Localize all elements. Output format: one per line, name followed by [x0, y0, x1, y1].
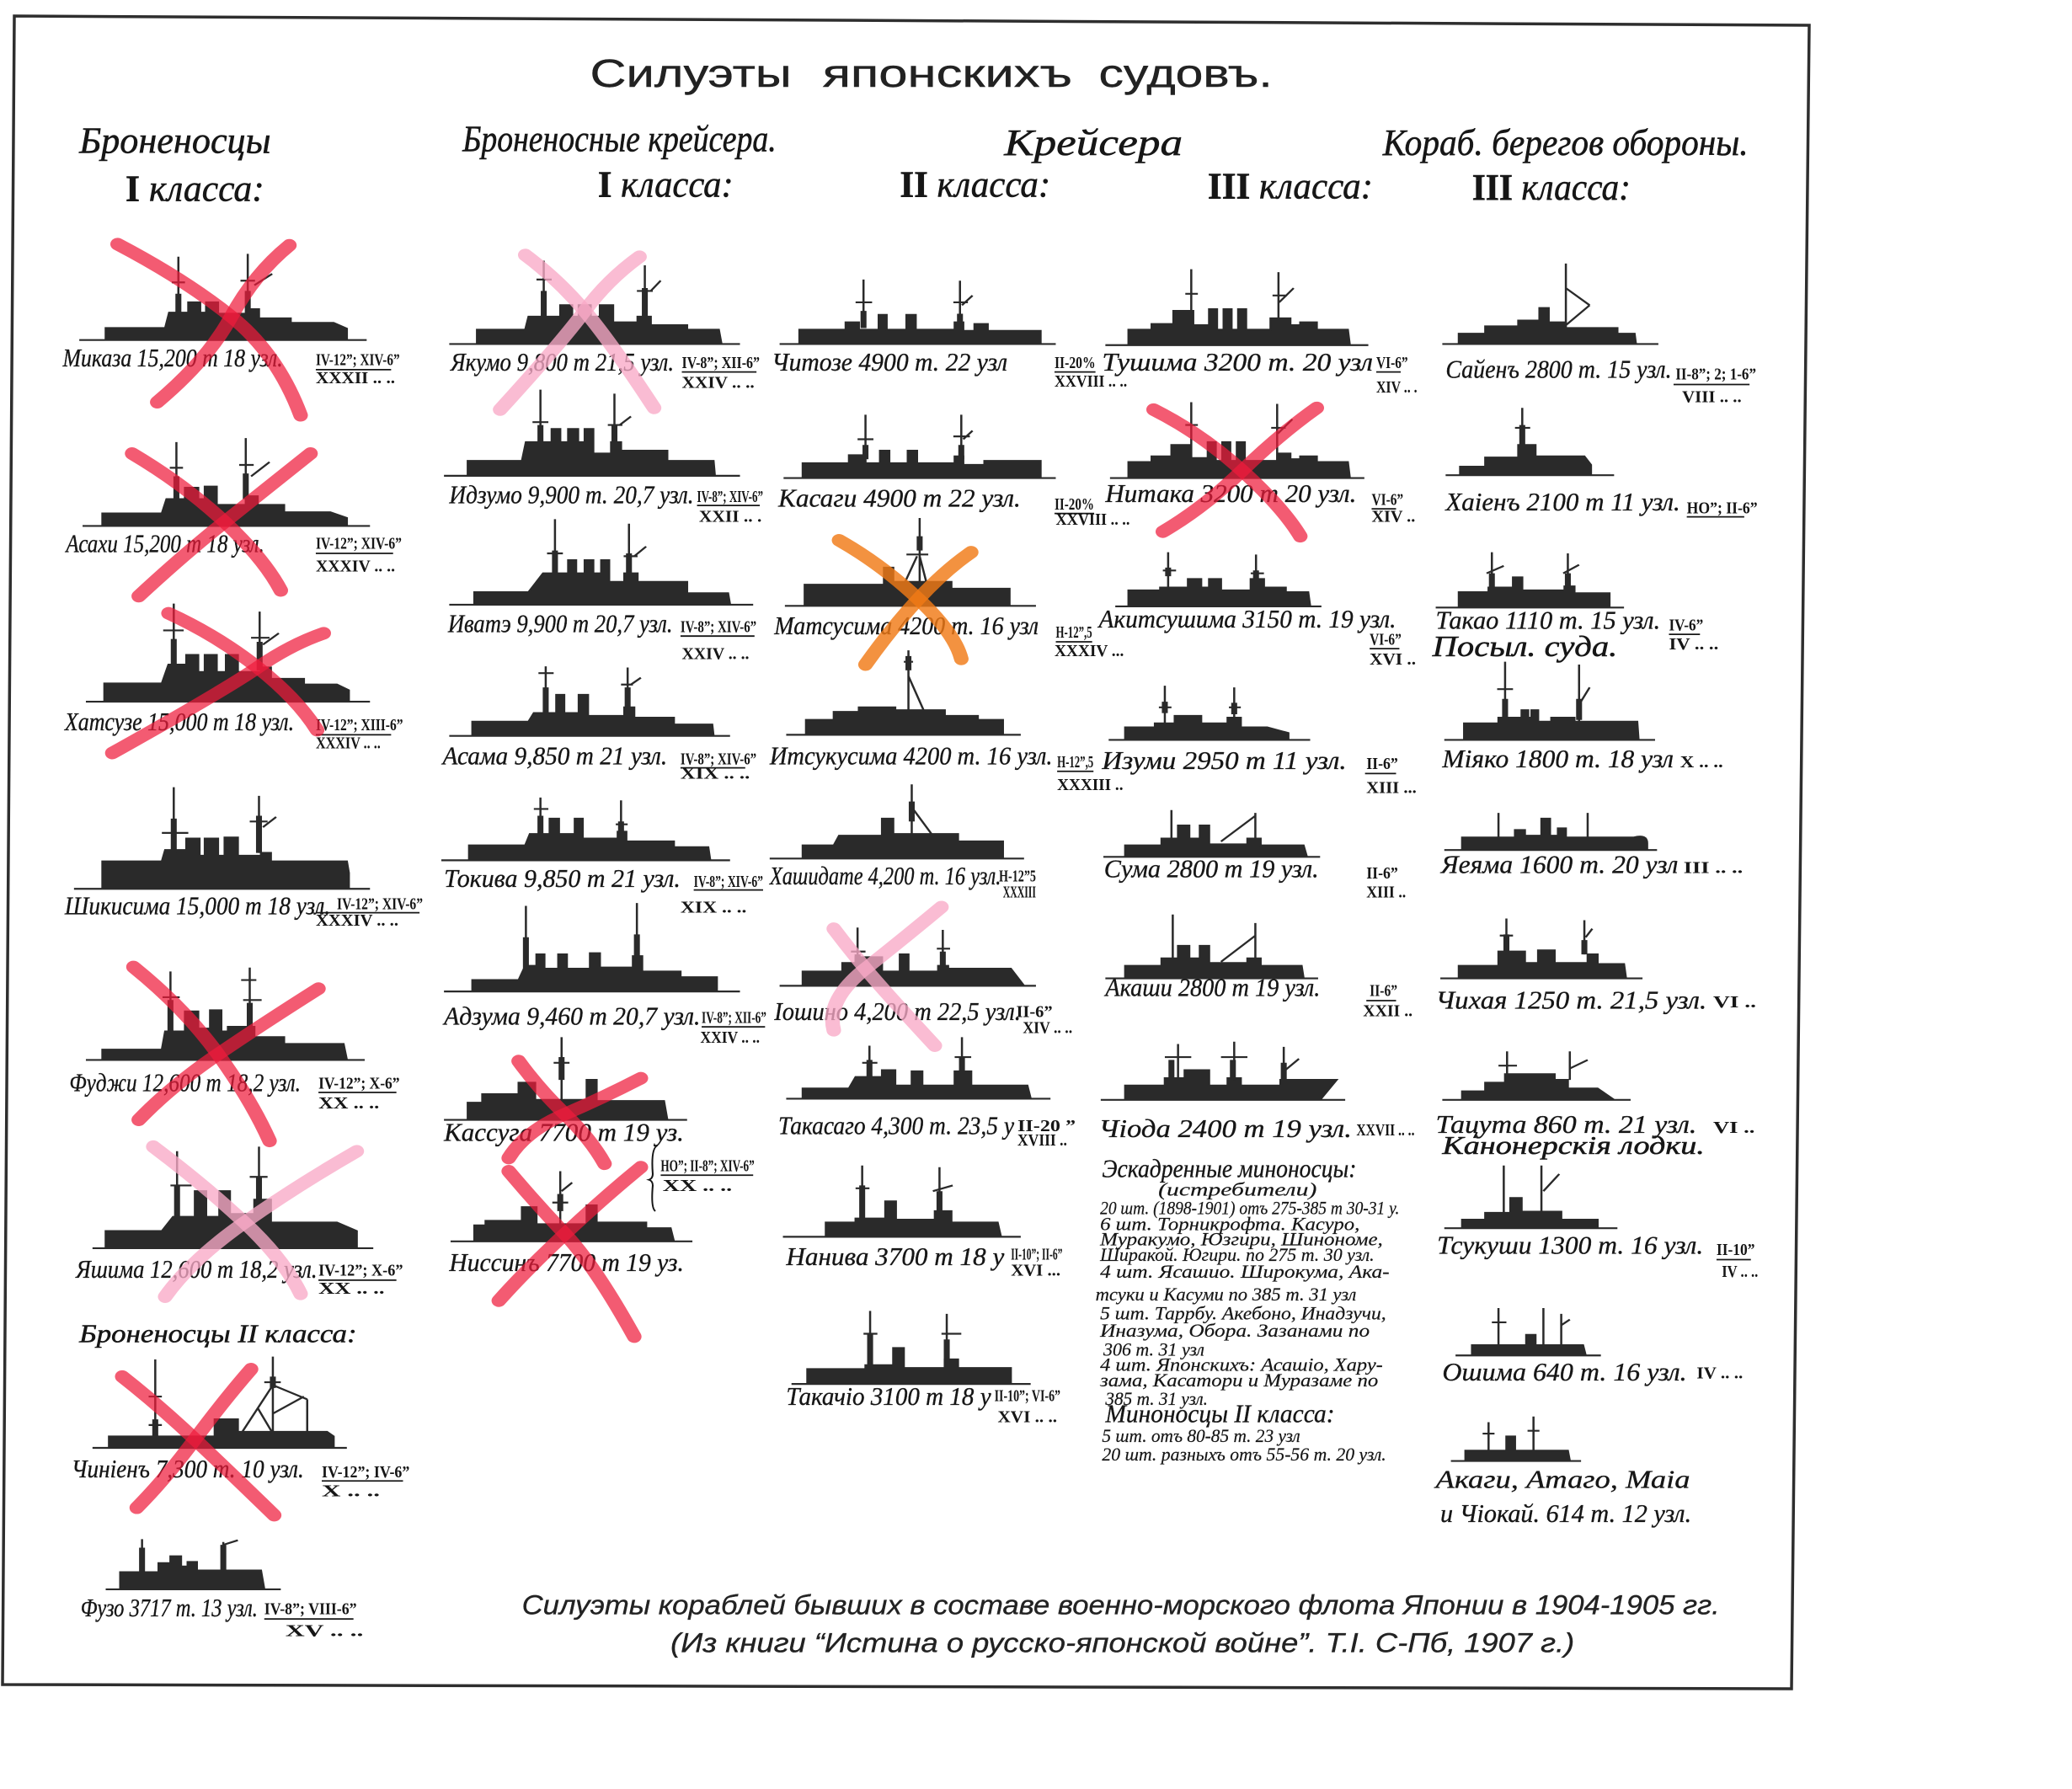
ship: Tsushima: VI-6” [1376, 352, 1408, 371]
armament note: Kasuga and Nisshin: XX .. .. [663, 1176, 732, 1195]
ship: Chitose [772, 280, 1055, 377]
ship: Yaeyama: III .. .. [1684, 857, 1743, 877]
ship: Asahi: IV-12”; XIV-6” [316, 533, 402, 553]
ship: Saien: VIII .. .. [1682, 387, 1742, 406]
ship: Oshima: Ошима 640 т. 16 узл. [1442, 1358, 1687, 1386]
text block: destroyers: 5 шт. отъ 80-85 т. 23 узл [1102, 1426, 1300, 1447]
ship: Chinyen: IV-12”; IV-6” [322, 1462, 409, 1482]
armament note: Tokiwa, Hashidate: XIX .. .. [681, 897, 746, 916]
ship: Azuma: Адзума 9,460 т 20,7 узл. [442, 1002, 700, 1031]
heading: second-class battleships: Броненосцы II класса: [78, 1320, 357, 1348]
lower-left area: ships and caption [64, 882, 1720, 1658]
ship: Tokiwa: IV-8”; XIV-6” [694, 872, 763, 891]
ship: Yaeyama: Яеяма 1600 т. 20 узл [1439, 850, 1678, 879]
ship: Fuso: IV-8”; VIII-6” [264, 1599, 357, 1618]
ship: Fuso: XV .. .. [286, 1621, 363, 1640]
ship: Takao: Такао 1110 т. 15 узл. [1436, 606, 1660, 635]
ship: Kasuga [443, 1037, 687, 1147]
ship: Nitaka: Нитака 3200 т 20 узл. [1104, 479, 1356, 508]
lower-right area: ships and destroyer list [995, 882, 1758, 1528]
ship: Yashima: Яшима 12,600 т 18,2 узл. [75, 1255, 318, 1284]
ship: Takao [1436, 553, 1718, 653]
caption and armament: Shikishima: XXXIV .. .. [316, 911, 398, 930]
ship: Nitaka: XIV .. [1371, 506, 1415, 526]
text block: destroyers: 20 шт. (1898-1901) отъ 275-385 т 30-31 у. [1100, 1198, 1399, 1219]
ship: Asama [441, 666, 756, 782]
cross: Kasuga [509, 1061, 641, 1164]
heading: coast defence ships [1382, 122, 1749, 208]
ship: Suma: II-6” [1366, 863, 1398, 883]
ship: Asahi: Асахи 15,200 т 18 узл. [65, 530, 264, 558]
ship: Mikasa: Миказа 15,200 т 18 узл. [62, 344, 283, 372]
cross: Chinyen [122, 1370, 275, 1515]
text block: destroyers: 20 шт. разныхъ отъ 55-56 т. 20 узл. [1102, 1444, 1386, 1465]
ship: Mikasa: IV-12”; XIV-6” [316, 350, 400, 369]
cross: Fuji [133, 967, 318, 1141]
heading: cruisers: II класса: [900, 164, 1050, 206]
armament notes: third column [995, 1001, 1076, 1426]
text block: destroyers: тсуки и Касуми по 385 т. 31 узл [1096, 1284, 1356, 1306]
ship: Oshima: IV .. .. [1696, 1363, 1743, 1382]
ship: Izumo: IV-8”; XIV-6” [697, 487, 763, 506]
text block: destroyers: зама, Касатори и Муразаме по [1099, 1370, 1378, 1391]
text block: destroyers: Миноносцы II класса: [1104, 1400, 1335, 1429]
armament notes: third column: II-20 ” [1017, 1116, 1076, 1135]
ship: Hatsuse: IV-12”; XIII-6” [316, 714, 403, 734]
ship: Akashi: Акаши 2800 т 19 узл. [1104, 974, 1320, 1002]
ship: Fuji: IV-12”; X-6” [318, 1073, 400, 1092]
ship: Mikasa [62, 254, 400, 387]
ship: Haien [1444, 408, 1758, 517]
ship: Akagi: и Чiокай. 614 т. 12 узл. [1440, 1499, 1691, 1528]
ship: Matsushima [773, 518, 1039, 641]
armament notes: Chitose, Kasagi, Matsushima, Itsukushima: XXXIV ... [1055, 640, 1124, 660]
heading: battleships: Броненосцы [78, 120, 271, 162]
ship: Hashidate: H-12”5 [999, 866, 1036, 885]
ship: Akitsushima: VI-6” [1370, 629, 1402, 649]
ship: Chinyen [72, 1357, 409, 1500]
ship: Izumo: XXII .. . [699, 506, 761, 526]
ship: Akitsushima: Акитсушима 3150 т. 19 узл. [1097, 605, 1396, 633]
ship: Asama: Асама 9,850 т 21 узл. [441, 742, 667, 771]
ship: Chiyoda [1099, 1042, 1414, 1143]
ship: Izumi: XIII ... [1366, 777, 1417, 797]
ship: Tatsuta [1436, 1051, 1754, 1140]
ship: Yakumo: Якумо 9,800 т 21,5 узл. [449, 348, 674, 377]
text block: destroyers: Ширакой. Югири. по 275 т. 30 узл. [1099, 1244, 1375, 1265]
armament notes: third column: XVI .. .. [998, 1407, 1057, 1426]
ship: Iwate: IV-8”; XIV-6” [681, 617, 756, 636]
ship: Miyako [1441, 662, 1723, 773]
text block: destroyers: Иназума, Обора. Зазанами по [1099, 1320, 1370, 1341]
ship: Tatsuta: VI .. [1713, 1118, 1754, 1137]
ship: Akagi: Акаги, Атаго, Маіа [1434, 1466, 1690, 1494]
armament notes: Chitose, Kasagi, Matsushima, Itsukushima: XXVIII .. .. [1055, 371, 1127, 391]
ship: Hatsuse [63, 604, 403, 752]
ship: Nitaka: VI-6” [1371, 489, 1403, 509]
heading: gunboats: Канонерскія лодки. [1441, 1131, 1705, 1161]
title: судовъ. [1098, 51, 1273, 95]
ship: Miyako: Міяко 1800 т. 18 узл [1441, 745, 1674, 773]
armament note: Suma: XIII .. [1366, 882, 1406, 901]
caption and armament: Shikishima: Шикисима 15,000 т 18 узл. [64, 892, 330, 921]
cross: Yoshino [832, 907, 942, 1045]
ship: Oshima [1442, 1308, 1743, 1386]
ship: Fuji: XX .. .. [318, 1093, 379, 1113]
armament notes: third column: XIV .. .. [1023, 1017, 1072, 1037]
heading: third class cruisers: III класса: [1208, 166, 1373, 207]
cross: Nisshin [499, 1167, 641, 1337]
caption and armament: Shikishima: IV-12”; XIV-6” [337, 894, 423, 913]
ship: Azuma: IV-8”; XII-6” [702, 1007, 766, 1027]
ship: Tokiwa: Токива 9,850 т 21 узл. [444, 864, 681, 894]
ship: Asama: XIX .. .. [681, 763, 750, 782]
armament notes: third column: II-10”; II-6” [1011, 1244, 1062, 1263]
heading: armoured cruisers: I класса: [598, 164, 734, 206]
ship: Yoshino [773, 927, 1036, 1026]
ship: Naniwa [783, 1166, 1021, 1272]
text block: destroyers: 4 шт. Японскихъ: Асашiо, Хару- [1100, 1354, 1383, 1375]
caption: source note: (Из книги “Истина о русско-японской войне”. Т.I. С-Пб, 1907 г.) [670, 1628, 1574, 1658]
ship: Takachio: Такачіо 3100 т 18 у [786, 1382, 991, 1412]
ship: Akashi [1104, 915, 1412, 1020]
ship: Kasagi: Касаги 4900 т 22 узл. [777, 484, 1021, 513]
ship: Fuji: Фуджи 12,600 т 18,2 узл. [69, 1069, 301, 1097]
ship: Asahi [65, 438, 402, 575]
ship: Chihaya: VI .. [1713, 992, 1756, 1012]
ship: Saien: II-8”; 2; 1-6” [1675, 364, 1756, 383]
ship: Itsukushima: Итсукусима 4200 т. 16 узл. [769, 742, 1053, 771]
ship: Yakumo [449, 261, 760, 392]
caption: source note: Силуэты кораблей бывших в составе военно-морского флота Японии в 1904-1905 гг. [522, 1590, 1720, 1621]
ship: Chinyen: Чиніенъ 7,300 т. 10 узл. [72, 1455, 304, 1484]
ship: Kasagi [777, 414, 1055, 513]
ship: Iwate: XXIV .. .. [682, 644, 750, 663]
ship: Iwate [447, 519, 756, 663]
armament note: Tokiwa, Hashidate [681, 882, 1036, 916]
ship: Hashidate [768, 784, 1036, 890]
ship: Izumo [444, 390, 763, 526]
ship: Izumi [1101, 686, 1417, 797]
ship: Saien: Сайенъ 2800 т. 15 узл. [1445, 355, 1672, 384]
title: японскихъ [823, 51, 1072, 95]
ship: Hashidate: Хашидате 4,200 т. 16 узл. [768, 862, 1001, 890]
ship: Yaeyama [1439, 813, 1743, 879]
ship: Fuji [69, 968, 400, 1113]
ship: Izumi: Изуми 2950 т 11 узл. [1101, 746, 1347, 775]
ship: Tsukushi: IV .. .. [1722, 1261, 1758, 1280]
ship: Chihaya [1436, 918, 1756, 1015]
ship: Yakumo: IV-8”; XII-6” [682, 352, 760, 371]
armament notes: third column: II-6” [1016, 1001, 1053, 1021]
text block: destroyers: Муракумо, Юзгири, Шинономе, [1099, 1229, 1383, 1250]
ship: Azuma: XXIV .. .. [700, 1028, 760, 1047]
ship: Takachio [786, 1311, 1031, 1412]
ship: Fuso: Фузо 3717 т. 13 узл. [81, 1594, 258, 1622]
armament note: Tokiwa, Hashidate: XXXIII [1003, 882, 1036, 901]
cross: Hatsuse [112, 613, 323, 753]
armament note: Kasuga and Nisshin: НО”; II-8”; XIV-6” [660, 1156, 755, 1175]
ship: Tsushima: Тушима 3200 т. 20 узл [1102, 348, 1373, 377]
ship: Yoshino: Іошино 4,200 т 22,5 узл. [773, 997, 1021, 1026]
cross: Mikasa [118, 244, 301, 415]
ship: Akitsushima [1097, 553, 1416, 669]
ship: Takasago [778, 1037, 1050, 1140]
heading: armoured cruisers: Броненосные крейсера. [462, 119, 777, 160]
ship: Itsukushima [769, 650, 1053, 771]
ship: Akagi [1434, 1417, 1691, 1528]
ship: Saien [1442, 264, 1756, 406]
armament notes: Chitose, Kasagi, Matsushima, Itsukushima: H-12”,5 [1056, 622, 1092, 642]
ship: Nitaka [1104, 402, 1415, 526]
text block: destroyers: 306 т. 31 узл [1103, 1339, 1204, 1360]
ship: Tsukushi: Тсукуши 1300 т. 16 узл. [1437, 1231, 1703, 1260]
text block: destroyers [1096, 1154, 1399, 1465]
ship: Yashima: XX .. .. [318, 1279, 385, 1298]
title [590, 51, 1273, 95]
ship: Yashima: IV-12”; X-6” [318, 1260, 403, 1279]
heading: cruisers [900, 122, 1183, 206]
heading: coast defence ships: III класса: [1472, 167, 1631, 208]
ship: Mikasa: XXXII .. .. [316, 368, 395, 387]
ship: Tsushima: XIV .. . [1376, 376, 1418, 397]
armament notes: Chitose, Kasagi, Matsushima, Itsukushima: XXXIII .. [1057, 775, 1124, 794]
ship: Izumi: II-6” [1366, 754, 1398, 773]
armament notes: Chitose, Kasagi, Matsushima, Itsukushima: II-20% [1055, 352, 1096, 371]
ship: Takao: IV .. .. [1669, 633, 1718, 653]
heading: battleships: I класса: [125, 168, 264, 210]
ship: Izumo: Идзумо 9,900 т. 20,7 узл. [449, 481, 694, 510]
ship: Shikishima [74, 788, 370, 889]
armament notes: third column: XVIII .. [1017, 1130, 1067, 1150]
cross: Yakumo [500, 255, 654, 409]
upper-left area: title, headings, ships [62, 51, 1273, 894]
ship: Haien: НО”; II-6” [1687, 498, 1758, 517]
text block: destroyers: 5 шт. Таррбу. Акебоно, Инадзучи, [1100, 1303, 1386, 1324]
ship: Matsushima: Матсусима 4200 т. 16 узл [773, 611, 1039, 641]
ship: Azuma [442, 903, 766, 1047]
ship: Hatsuse: XXXIV .. .. [316, 733, 381, 752]
text block: destroyers: Эскадренные миноносцы: [1102, 1154, 1356, 1183]
ship: Asahi: XXXIV .. .. [316, 556, 395, 575]
armament notes: third column: XVI ... [1011, 1260, 1060, 1279]
ship: Akashi: II-6” [1370, 980, 1397, 1000]
heading: despatch vessels: Посыл. суда. [1432, 630, 1617, 663]
ship: Naniwa: Нанива 3700 т 18 у [786, 1242, 1004, 1272]
caption: source note [522, 1590, 1720, 1658]
ship: Asama: IV-8”; XIV-6” [681, 749, 756, 768]
title: Силуэты [590, 51, 792, 95]
armament notes: Chitose, Kasagi, Matsushima, Itsukushima [1055, 352, 1129, 794]
ship: Yakumo: XXIV .. .. [682, 372, 755, 392]
ship: Akitsushima: XVI .. [1370, 649, 1416, 669]
ship: Nisshin [449, 1171, 692, 1277]
cross: Nitaka [1154, 408, 1316, 537]
ship: Tsukushi [1437, 1166, 1758, 1280]
text block: destroyers: 6 шт. Торникрофта. Касуро, [1100, 1214, 1359, 1235]
armament notes: third column: II-10”; VI-6” [995, 1386, 1060, 1405]
ship: Suma [1103, 810, 1398, 884]
ship: Hatsuse: Хатсузе 15,000 т 18 узл. [63, 708, 294, 736]
heading: cruisers: Крейсера [1003, 122, 1183, 163]
ship: Kasuga: Кассуга 7700 т 19 уз. [443, 1119, 684, 1147]
cross: Matsushima [839, 540, 971, 665]
armament notes: Chitose, Kasagi, Matsushima, Itsukushima: XXVIII .. .. [1056, 510, 1129, 529]
ship: Chihaya: Чихая 1250 т. 21,5 узл. [1436, 986, 1706, 1015]
armament notes: Chitose, Kasagi, Matsushima, Itsukushima: H-12”,5 [1057, 751, 1093, 772]
ship: Takasago: Такасаго 4,300 т. 23,5 у [778, 1112, 1014, 1140]
ship: Yashima [75, 1146, 403, 1298]
ship: Chinyen: X .. .. [322, 1481, 380, 1500]
cross: Yashima [153, 1146, 357, 1296]
ship: Suma: Сума 2800 т 19 узл. [1104, 855, 1319, 884]
ship: Fuso [81, 1539, 363, 1640]
ship: Chitose: Читозе 4900 т. 22 узл [772, 348, 1007, 377]
cross: Asahi [132, 453, 311, 596]
ship: Tatsuta: Тацута 860 т. 21 узл. [1436, 1110, 1696, 1140]
armament notes: Chitose, Kasagi, Matsushima, Itsukushima: II-20% [1055, 494, 1094, 513]
ship: Chiyoda: Чіода 2400 т 19 узл. [1099, 1114, 1352, 1143]
ship: Miyako: X .. .. [1680, 751, 1723, 772]
text block: destroyers: 385 т. 31 узл. [1104, 1389, 1208, 1410]
ship: Tsushima [1102, 270, 1418, 397]
ship: Haien: Хаіенъ 2100 т 11 узл. [1444, 488, 1680, 517]
text block: destroyers: 4 шт. Ясашио. Широкума, Ака- [1100, 1262, 1390, 1283]
upper-right area: title end, headings, ships [1055, 122, 1758, 884]
ship: Tokiwa [441, 798, 763, 894]
text block: destroyers: (истребители) [1158, 1179, 1316, 1200]
heading: armoured cruisers [462, 119, 777, 206]
ship: Nisshin: Ниссинъ 7700 т 19 уз. [449, 1248, 684, 1277]
ship: Tsukushi: II-10” [1717, 1240, 1754, 1259]
ship: Akashi: XXII .. [1363, 1001, 1412, 1020]
armament note: Kasuga and Nisshin [649, 1145, 755, 1211]
heading: battleships [78, 120, 271, 210]
ship: Iwate: Иватэ 9,900 т 20,7 узл. [447, 610, 673, 638]
ship: Takao: IV-6” [1669, 615, 1703, 634]
ship: Chiyoda: XXVII .. .. [1356, 1119, 1414, 1139]
heading: coast defence ships: Кораб. берегов обороны. [1382, 122, 1749, 163]
